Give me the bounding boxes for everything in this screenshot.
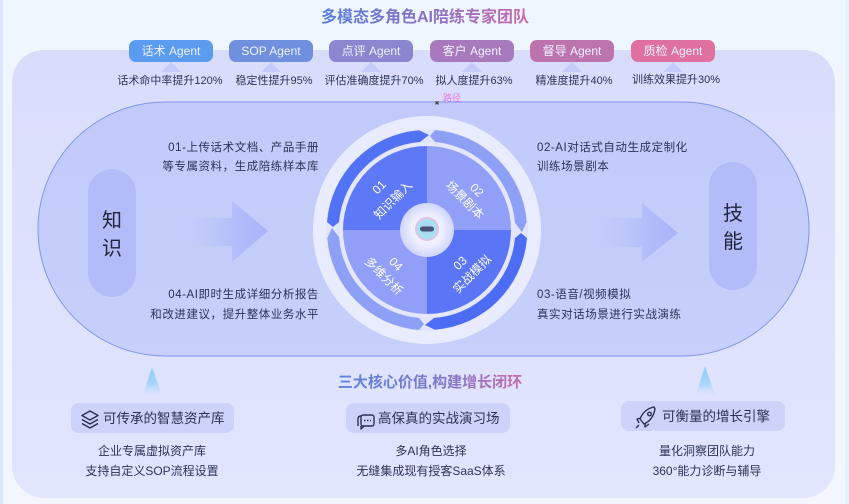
step 03 text: 03-语音/视频模拟	[537, 287, 631, 301]
path marker label: ✖	[434, 100, 440, 107]
quadrant 01: 知识输入	[371, 178, 415, 222]
quadrant 03: 实战模拟	[450, 252, 494, 296]
title: 多模态多角色AI陪练专家团队	[321, 7, 529, 26]
step 04 text	[150, 287, 319, 321]
value 1 description: 企业专属虚拟资产库	[98, 443, 206, 458]
step 01 text: 01-上传话术文档、产品手册	[168, 140, 319, 154]
path marker label: 路径	[443, 92, 461, 103]
quadrant 03: 03	[450, 253, 470, 273]
agent improvement stats: 稳定性提升95%	[235, 73, 313, 87]
step 01 text	[162, 140, 319, 173]
quadrant 04	[343, 230, 427, 314]
step 04 text: 04-AI即时生成详细分析报告	[168, 287, 319, 301]
quadrant 02: 场景剧本	[443, 178, 487, 222]
agent row	[129, 40, 715, 72]
agent improvement stats: 精准度提升40%	[535, 73, 613, 87]
value 3 description	[653, 443, 761, 478]
agent improvement stats: 评估准确度提升70%	[324, 73, 424, 87]
agent: 督导: 督导 Agent	[543, 43, 602, 58]
step 03 text	[537, 287, 682, 321]
value card 2: 高保真的实战演习场	[378, 410, 500, 426]
agent improvement stats: 拟人度提升63%	[435, 73, 513, 87]
quadrant 02	[427, 146, 511, 230]
icon: chat bubble	[358, 415, 374, 429]
center hub icon	[400, 203, 454, 257]
agent improvement stats: 训练效果提升30%	[632, 72, 720, 86]
value 3 description: 量化洞察团队能力	[659, 443, 755, 458]
value 2 description: 多AI角色选择	[395, 444, 467, 458]
icon: layers	[82, 411, 98, 428]
value 1 description	[85, 443, 219, 478]
inner ring	[340, 143, 514, 317]
step 01 text: 等专属资料，生成陪练样本库	[162, 159, 319, 173]
agent: 话术	[129, 40, 213, 72]
value 2 description	[356, 444, 506, 478]
cycle arrow 4	[327, 228, 424, 330]
agent: 点评	[329, 40, 413, 72]
agent: 质检: 质检 Agent	[644, 43, 703, 58]
value card 2	[346, 403, 510, 433]
icon: rocket	[636, 407, 655, 428]
quadrant 03	[427, 230, 511, 314]
step 02 text	[537, 140, 688, 173]
agent: 督导	[530, 40, 614, 72]
quadrant 01	[343, 146, 427, 230]
value card 3: 可衡量的增长引擎	[662, 409, 770, 424]
cycle arrow 2	[430, 130, 527, 232]
capsule: 技能: 技	[723, 202, 743, 225]
agent improvement stats: 话术命中率提升120%	[117, 73, 223, 87]
wheel outer ring	[313, 116, 541, 344]
step 03 text: 真实对话场景进行实战演练	[537, 307, 682, 321]
path marker label	[434, 92, 461, 107]
agent: SOP: SOP Agent	[241, 44, 301, 58]
cycle arrow 1	[327, 130, 429, 227]
value 1 description: 支持自定义SOP流程设置	[85, 463, 219, 478]
step 02 text: 训练场景剧本	[537, 159, 609, 173]
value card 1: 可传承的智慧资产库	[103, 411, 224, 426]
agent: 点评: 点评 Agent	[342, 44, 401, 58]
agent: 质检	[631, 40, 715, 72]
agent improvement stats	[117, 72, 720, 87]
step 04 text: 和改进建议，提升整体业务水平	[150, 307, 319, 321]
quadrant 01: 01	[369, 177, 389, 197]
agent: 话术: 话术 Agent	[142, 44, 201, 58]
cycle arrow 3	[425, 233, 527, 330]
step 02 text: 02-AI对话式自动生成定制化	[537, 140, 688, 154]
cycle wheel	[313, 116, 541, 344]
quadrant 04: 04	[386, 254, 406, 274]
arrow: right	[587, 203, 678, 262]
up arrow left	[142, 367, 163, 398]
capsule: 技能	[709, 162, 757, 290]
capsule: 知识: 识	[102, 238, 122, 260]
capsule: 知识: 知	[102, 209, 122, 232]
arrow: left	[177, 201, 268, 262]
value card 3	[621, 401, 785, 431]
process pill	[38, 102, 809, 356]
quadrant 04: 多维分析	[362, 254, 406, 298]
agent: 客户	[430, 40, 514, 72]
capsule: 技能: 能	[723, 230, 743, 253]
heading: core values: 三大核心价值,构建增长闭环	[338, 373, 522, 391]
value 3 description: 360°能力诊断与辅导	[653, 463, 761, 478]
value card 1	[71, 403, 234, 433]
quadrant 02: 02	[467, 180, 487, 200]
value 2 description: 无缝集成现有授客SaaS体系	[356, 463, 506, 478]
capsule: 知识	[88, 169, 136, 297]
up arrow right	[695, 366, 716, 398]
agent: 客户: 客户 Agent	[443, 43, 502, 58]
agent: SOP	[229, 40, 313, 72]
